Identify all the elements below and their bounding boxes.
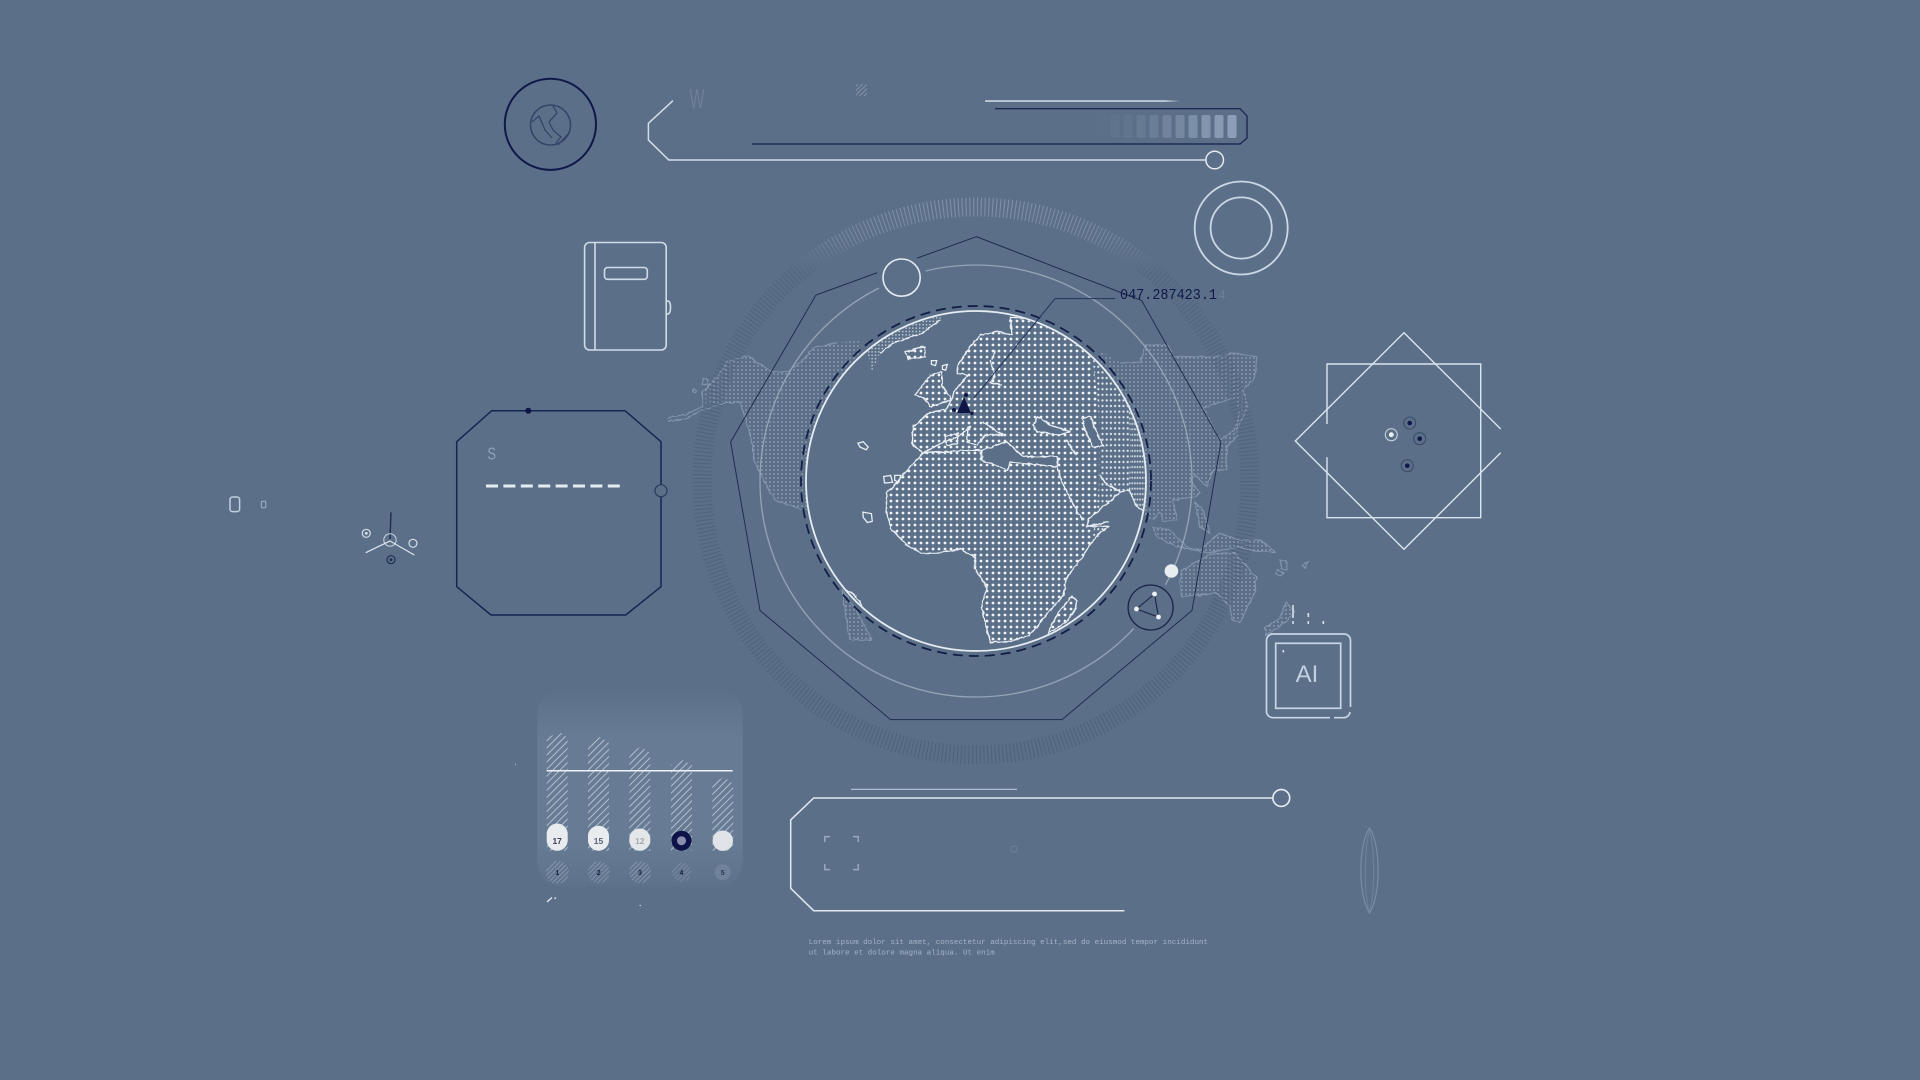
progress ticks bbox=[1098, 115, 1236, 138]
AI label: AI bbox=[1296, 661, 1318, 688]
value pills: 17 bbox=[552, 836, 562, 846]
tick ring bbox=[702, 207, 1250, 755]
marker triangle bbox=[957, 397, 971, 413]
dashed divider bbox=[486, 484, 620, 488]
coordinate number: 047.287423.1 bbox=[1120, 287, 1217, 304]
bracket end circle bbox=[1206, 151, 1223, 169]
dotted continents on globe bbox=[847, 316, 1145, 644]
callout: coordinate leader bbox=[952, 287, 1226, 415]
top highlight line bbox=[985, 100, 1180, 102]
panel: bar chart bbox=[515, 690, 743, 906]
body text bbox=[809, 939, 1208, 958]
small white circle on ring bbox=[877, 253, 927, 303]
marker dots bbox=[952, 393, 974, 415]
greenland and south america bbox=[850, 317, 941, 603]
panel: bottom bracket bbox=[791, 789, 1290, 911]
dashed navy ring bbox=[801, 306, 1151, 656]
threshold line bbox=[547, 770, 733, 772]
index badges: 2 bbox=[597, 870, 601, 877]
tiny marks bbox=[515, 764, 641, 906]
white dot on ring bbox=[1165, 564, 1178, 578]
index badges: 3 bbox=[638, 870, 642, 877]
white bracket line bbox=[648, 101, 1206, 160]
target dots bbox=[1385, 417, 1426, 472]
diamond bbox=[1295, 333, 1501, 549]
coast outlines bbox=[847, 316, 1142, 644]
top bracket panel bbox=[648, 82, 1247, 169]
value pills: 12 bbox=[635, 836, 645, 846]
index badges bbox=[546, 861, 731, 884]
top short line bbox=[851, 788, 1017, 790]
polygon frame bbox=[731, 237, 1221, 720]
globe outline bbox=[806, 311, 1146, 651]
panel: octagon frame bbox=[457, 408, 667, 615]
hatched bars bbox=[547, 732, 733, 851]
navy bar frame bbox=[752, 109, 1247, 144]
faint letter W: W bbox=[689, 82, 705, 114]
flat dotted world map behind globe bbox=[667, 340, 1308, 640]
triangle network icon bbox=[1124, 580, 1178, 634]
map outlines bbox=[667, 343, 1308, 640]
icon: AI chip bbox=[1266, 605, 1350, 718]
small device icons bbox=[230, 497, 266, 512]
map dots bbox=[702, 340, 1295, 640]
body text: Lorem ipsum dolor sit amet, consectetur adipiscing elit,sed do eiusmod tempor incididunt bbox=[809, 939, 1208, 947]
faint node bbox=[1011, 846, 1017, 852]
value pills: 15 bbox=[594, 836, 603, 846]
focus corners bbox=[825, 837, 858, 870]
hatch swatch bbox=[856, 84, 867, 96]
index badges: 1 bbox=[555, 870, 559, 877]
icon: notebook bbox=[585, 242, 670, 350]
atlantic islands bbox=[858, 361, 947, 522]
index badges: 4 bbox=[680, 870, 684, 877]
square bbox=[1327, 364, 1481, 518]
value pills bbox=[547, 824, 733, 851]
chip pins bbox=[1283, 605, 1323, 652]
icon: globe badge bbox=[505, 79, 596, 170]
panel: rotating squares bbox=[1295, 333, 1501, 549]
body text: ut labore et dolore magna aliqua. Ut enim bbox=[809, 950, 995, 958]
concentric rings icon bbox=[1195, 182, 1288, 274]
side ring node bbox=[655, 485, 667, 497]
faint trailing digit: 4 bbox=[1218, 288, 1226, 303]
globe bbox=[801, 305, 1170, 656]
tri-node icon bbox=[362, 512, 417, 564]
bracket line bbox=[791, 798, 1273, 911]
outer grey ring bbox=[760, 265, 1192, 697]
lens shape bbox=[1361, 828, 1378, 913]
end circle bbox=[1273, 790, 1290, 806]
letter S: S bbox=[487, 445, 496, 464]
top marker dot bbox=[525, 408, 531, 414]
index badges: 5 bbox=[721, 870, 725, 877]
